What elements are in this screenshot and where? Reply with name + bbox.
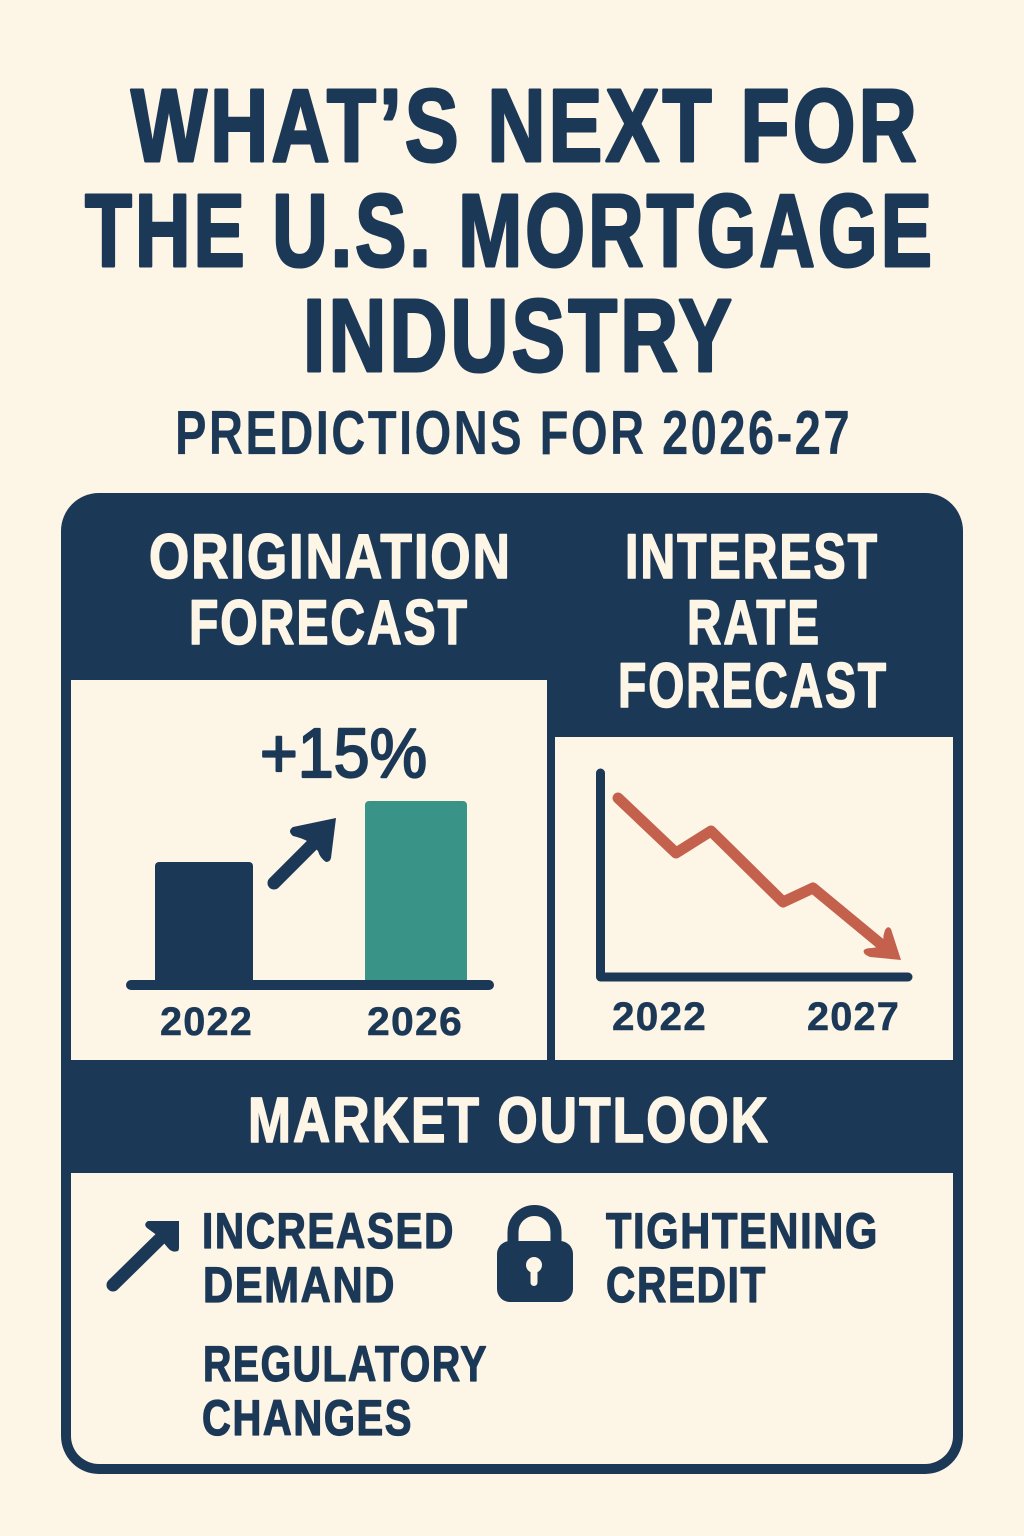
- heading: interest rate forecast: INTEREST: [625, 522, 879, 592]
- axis label: 2027: 2027: [807, 995, 900, 1039]
- baseline axis: [126, 980, 494, 990]
- item: tightening credit: [606, 1203, 879, 1313]
- item: regulatory changes: [202, 1336, 488, 1446]
- icon: rising arrow: [113, 1221, 179, 1285]
- item: regulatory changes: CHANGES: [202, 1390, 413, 1446]
- heading: interest rate forecast: FORECAST: [618, 651, 888, 721]
- panel: origination chart: [71, 680, 547, 1060]
- panel: market outlook: [71, 1173, 953, 1464]
- chart axes: [600, 773, 908, 977]
- axis label: 2026: 2026: [367, 1000, 463, 1044]
- rate trend line: [618, 798, 901, 960]
- icon: growth arrow: [274, 818, 336, 883]
- item: increased demand: [202, 1203, 455, 1313]
- panel: interest rate chart: [555, 737, 953, 1060]
- growth label: +15%: [260, 714, 427, 792]
- bar: 2026: [365, 801, 467, 982]
- item: increased demand: DEMAND: [203, 1257, 396, 1313]
- panel: main dashboard frame: [61, 493, 963, 1474]
- bar: 2022: [155, 862, 253, 985]
- item: tightening credit: TIGHTENING: [606, 1203, 879, 1259]
- axis label: 2022: 2022: [612, 995, 707, 1039]
- heading: origination forecast: [149, 522, 512, 658]
- heading: interest rate forecast: RATE: [687, 588, 821, 658]
- item: tightening credit: CREDIT: [606, 1257, 767, 1313]
- icon: padlock: [497, 1210, 573, 1302]
- heading: interest rate forecast: [618, 522, 888, 721]
- heading: origination forecast: FORECAST: [189, 588, 469, 658]
- heading: origination forecast: ORIGINATION: [149, 522, 512, 592]
- item: increased demand: INCREASED: [202, 1203, 455, 1259]
- axis label: 2022: 2022: [160, 1000, 253, 1044]
- title: INDUSTRY: [303, 278, 735, 393]
- item: regulatory changes: REGULATORY: [203, 1336, 488, 1392]
- heading: market outlook: MARKET OUTLOOK: [248, 1084, 770, 1156]
- title: [85, 68, 935, 393]
